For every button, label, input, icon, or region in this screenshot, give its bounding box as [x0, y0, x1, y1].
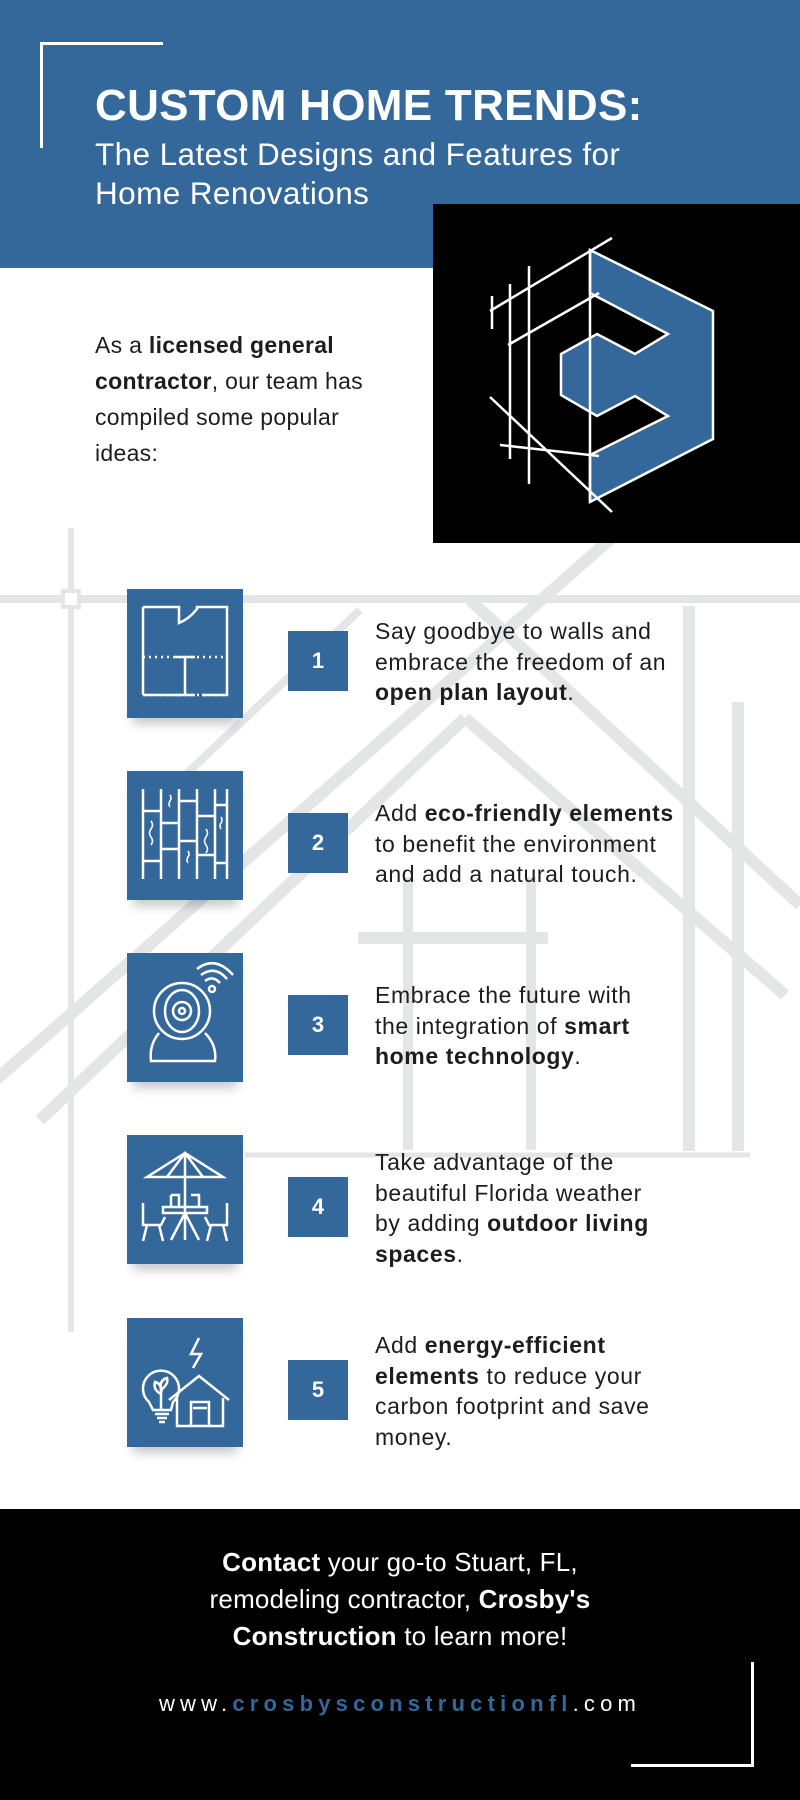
text 4: spaces.	[375, 1240, 464, 1266]
number 5	[288, 1360, 348, 1420]
decorative bracket bottom-right	[631, 1662, 754, 1767]
number 1: 1	[312, 648, 324, 673]
text 3: Embrace the future with	[375, 982, 632, 1008]
subtitle: The Latest Designs and Features for	[95, 136, 620, 172]
intro text: contractor, our team has	[95, 368, 363, 394]
header band	[0, 0, 800, 268]
text 5	[375, 1332, 650, 1450]
website URL: www.crosbysconstructionfl.com	[159, 1691, 641, 1716]
footer call to action: Contact your go-to Stuart, FL,	[222, 1547, 578, 1577]
icon: eco wood panels	[127, 771, 243, 900]
text 1: embrace the freedom of an	[375, 648, 666, 674]
number 1	[288, 631, 348, 691]
text 3: the integration of smart	[375, 1012, 630, 1038]
item 3	[127, 953, 632, 1093]
item 2	[127, 771, 674, 911]
number 5: 5	[312, 1377, 324, 1402]
footer call to action: remodeling contractor, Crosby's	[210, 1584, 590, 1614]
footer	[0, 1509, 800, 1800]
subtitle	[95, 136, 620, 211]
intro text	[95, 332, 363, 466]
text 4	[375, 1149, 649, 1267]
intro text: As a licensed general	[95, 332, 334, 358]
title: CUSTOM HOME TRENDS:	[95, 81, 643, 130]
footer call to action	[210, 1547, 590, 1651]
text 4: Take advantage of the	[375, 1149, 614, 1175]
text 1: Say goodbye to walls and	[375, 618, 652, 644]
intro text: compiled some popular	[95, 404, 339, 430]
text 2: and add a natural touch.	[375, 861, 637, 887]
text 5: Add energy-efficient	[375, 1332, 606, 1358]
number 2	[288, 813, 348, 873]
icon: energy house and bulb	[127, 1318, 243, 1447]
text 4: beautiful Florida weather	[375, 1180, 642, 1206]
number 4: 4	[312, 1194, 324, 1219]
text 2	[375, 800, 674, 887]
text 1	[375, 618, 666, 705]
footer call to action: Construction to learn more!	[233, 1621, 567, 1651]
item 5	[127, 1318, 650, 1458]
text 5: carbon footprint and save	[375, 1393, 650, 1419]
text 4: by adding outdoor living	[375, 1210, 649, 1236]
text 1: open plan layout.	[375, 679, 574, 705]
number 4	[288, 1177, 348, 1237]
number 2: 2	[312, 830, 324, 855]
subtitle: Home Renovations	[95, 175, 369, 211]
intro text: ideas:	[95, 440, 158, 466]
icon: patio umbrella table	[127, 1135, 243, 1264]
text 5: elements to reduce your	[375, 1362, 642, 1388]
number 3	[288, 995, 348, 1055]
text 3: home technology.	[375, 1043, 581, 1069]
item 4	[127, 1135, 649, 1275]
icon: smart camera	[127, 953, 243, 1082]
icon: floor plan	[127, 589, 243, 718]
logo black box	[433, 204, 800, 543]
text 5: money.	[375, 1424, 452, 1450]
text 3	[375, 982, 632, 1069]
text 2: to benefit the environment	[375, 830, 657, 856]
decorative bracket top-left	[40, 42, 163, 148]
item 1	[127, 589, 666, 729]
number 3: 3	[312, 1012, 324, 1037]
text 2: Add eco-friendly elements	[375, 800, 674, 826]
